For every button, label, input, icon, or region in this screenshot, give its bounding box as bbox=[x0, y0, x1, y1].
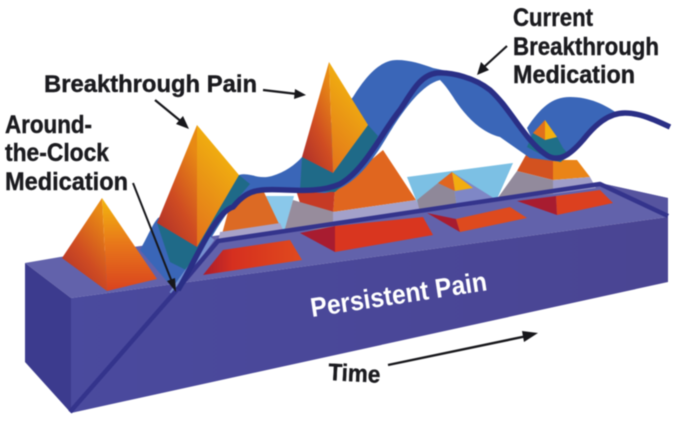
line: around-the-clock medication level bbox=[70, 184, 668, 412]
label: current breakthrough medication: Medication bbox=[513, 61, 635, 89]
pyramid 2 lower section bbox=[203, 188, 302, 275]
pyramid 5: top tip bbox=[533, 120, 557, 140]
pyramid 1: leftmost bbox=[62, 198, 157, 291]
arrow: around-the-clock medication bbox=[133, 183, 176, 292]
arrow: breakthrough pain to second peak bbox=[155, 100, 189, 129]
ribbon: current breakthrough medication bbox=[140, 60, 617, 285]
arrow: current breakthrough medication bbox=[477, 46, 507, 75]
label: current breakthrough medication: Breakthrough bbox=[513, 33, 659, 61]
pyramid 3 lower section bbox=[284, 150, 433, 252]
pyramid 5: right peak bbox=[497, 153, 613, 215]
block: persistent pain bar bbox=[25, 183, 668, 413]
label: current breakthrough medication: Current bbox=[513, 4, 594, 32]
line: current breakthrough medication peak curve bbox=[178, 73, 670, 290]
label: persistent pain: Persistent Pain bbox=[308, 266, 489, 323]
light blue background band bbox=[258, 163, 513, 232]
pyramid 2: upper section bbox=[157, 125, 239, 247]
label: around-the-clock medication: Around- bbox=[5, 111, 92, 139]
label: around-the-clock medication: Medication bbox=[5, 168, 128, 196]
label: around-the-clock medication: the-Clock bbox=[5, 139, 109, 167]
label: time: Time bbox=[328, 359, 381, 389]
pyramid 3: upper section bbox=[302, 62, 368, 173]
label: current breakthrough medication bbox=[513, 4, 659, 89]
label: around-the-clock medication bbox=[5, 111, 128, 196]
arrow: time direction bbox=[388, 331, 538, 365]
arrow: breakthrough pain to third peak bbox=[263, 89, 306, 99]
pyramid 4: small middle peak bbox=[417, 172, 527, 232]
label: breakthrough pain: Breakthrough Pain bbox=[44, 71, 257, 98]
teal overlap bands bbox=[157, 125, 570, 272]
